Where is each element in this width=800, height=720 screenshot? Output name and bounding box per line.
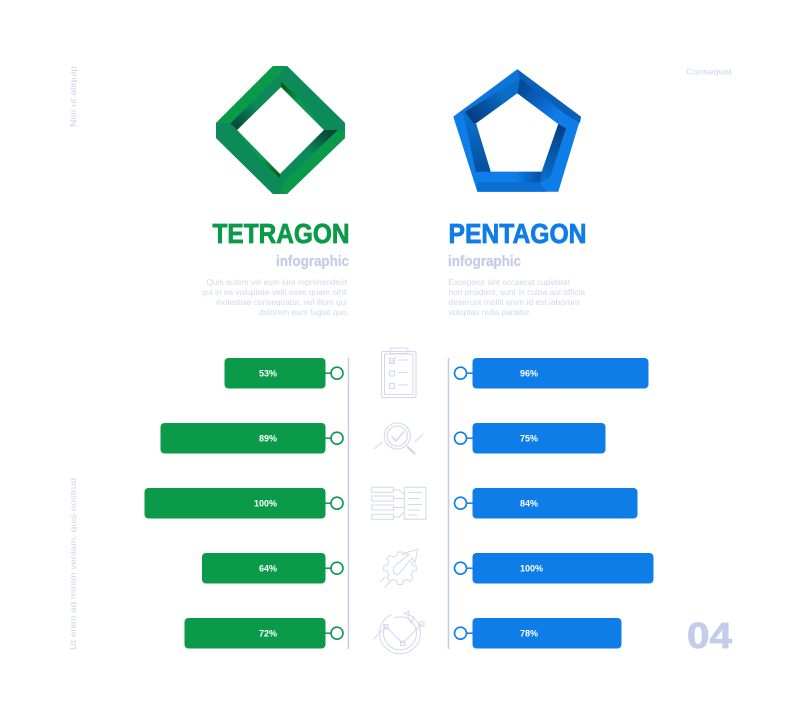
- bar: pentagon 100%: 100%: [520, 564, 543, 574]
- icon: circular line chart: [373, 611, 424, 654]
- bar: tetragon 64%: 64%: [259, 564, 277, 574]
- text block: pentagon: deserunt mollit anim id est laborum: [448, 298, 580, 307]
- bar: tetragon 72%: [184, 618, 343, 648]
- bar: pentagon 100%: [454, 553, 654, 584]
- bar: tetragon 53%: 53%: [259, 368, 277, 378]
- bar: pentagon 84%: [454, 488, 638, 518]
- bar chart: tetragon: [144, 358, 343, 648]
- text block: tetragon: dolorem eum fugiat quo.: [259, 308, 349, 317]
- bar: tetragon 89%: [160, 423, 343, 454]
- icon: gear with arrow: [380, 549, 418, 588]
- bar: tetragon 100%: [144, 488, 343, 518]
- page number: 04: [687, 615, 732, 656]
- axis line: left: [348, 358, 350, 649]
- text block: pentagon: non proident, sunt in culpa qui officia: [448, 288, 586, 297]
- bar: tetragon 53%: [224, 358, 343, 388]
- bar: tetragon 100%: 100%: [254, 498, 277, 508]
- icon: impossible pentagon: [453, 69, 581, 192]
- bar: pentagon 75%: [454, 423, 606, 454]
- text block: pentagon: Excepteur sint occaecat cupidatat: [448, 278, 571, 287]
- subheading: tetragon: infographic: [276, 253, 349, 270]
- text block: tetragon: [202, 278, 349, 317]
- icon: list to document: [372, 487, 426, 519]
- side label: bottom left: Ut enim ad minim veniam, quis nostrud: [69, 478, 78, 650]
- bar chart: pentagon: [454, 358, 654, 648]
- heading: pentagon: PENTAGON: [448, 218, 586, 249]
- text block: tetragon: molestiae consequatur, vel illum qui: [216, 298, 347, 307]
- bar: pentagon 96%: 96%: [520, 368, 538, 378]
- icon: magnifier with check: [374, 423, 423, 454]
- text block: tetragon: qui in ea voluptate velit esse quam nihil: [202, 288, 347, 297]
- text block: pentagon: voluptas nulla pariatur.: [448, 308, 532, 317]
- bar: pentagon 96%: [454, 358, 648, 388]
- text block: tetragon: Quis autem vel eum iure reprehenderit: [206, 278, 348, 287]
- bar: pentagon 78%: 78%: [520, 628, 538, 638]
- bar: tetragon 89%: 89%: [259, 434, 277, 444]
- bar: pentagon 78%: [454, 618, 622, 648]
- bar: tetragon 64%: [202, 553, 343, 584]
- axis line: right: [448, 358, 450, 649]
- icon: impossible tetragon: [216, 66, 345, 194]
- subheading: pentagon: infographic: [448, 253, 521, 270]
- heading: tetragon: TETRAGON: [212, 218, 350, 249]
- text block: pentagon: [448, 278, 586, 317]
- side label: top right: Consequat: [686, 66, 733, 76]
- bar: tetragon 72%: 72%: [259, 628, 277, 638]
- bar: pentagon 75%: 75%: [520, 434, 538, 444]
- bar: pentagon 84%: 84%: [520, 498, 538, 508]
- icon: clipboard checklist: [382, 348, 416, 398]
- side label: top left: Nisi ut aliquip: [69, 65, 78, 127]
